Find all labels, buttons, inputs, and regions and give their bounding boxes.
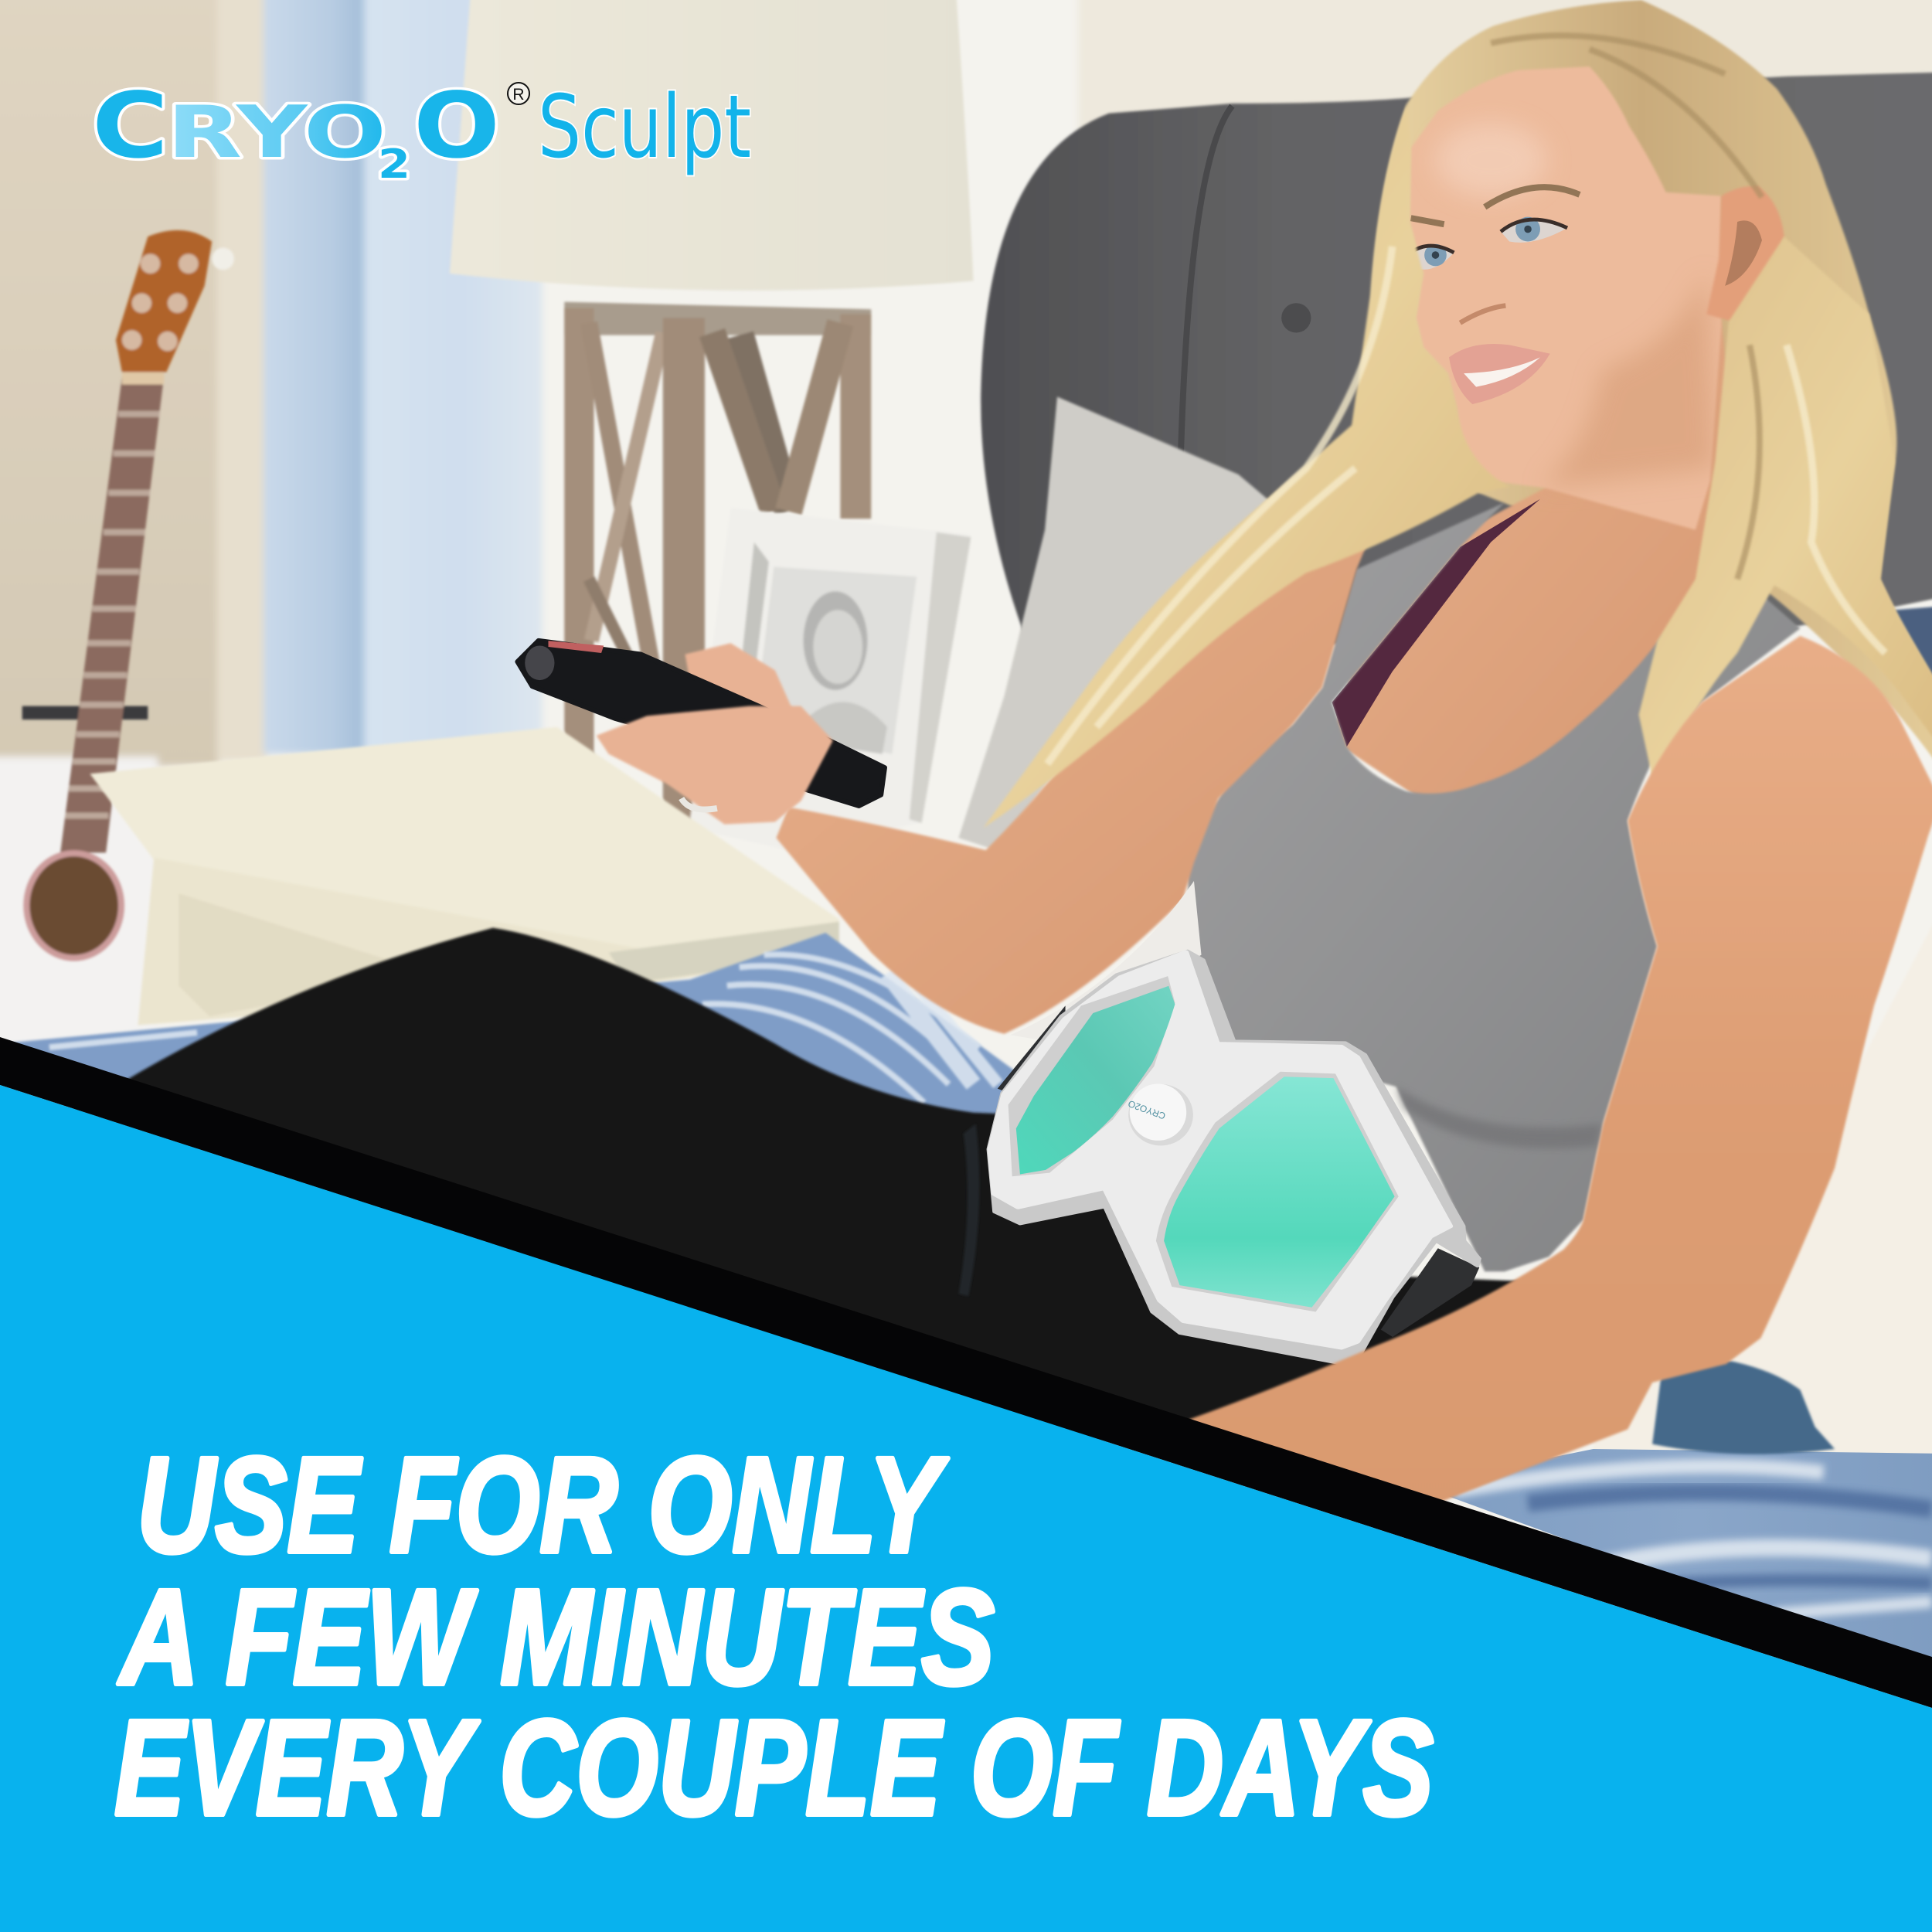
right arm and forearm [1189, 636, 1932, 1515]
bedding right [1417, 1449, 1932, 1688]
leggings fold [958, 1124, 979, 1296]
registered mark: R [512, 86, 525, 104]
left strap [998, 1005, 1066, 1094]
button [1128, 1083, 1193, 1145]
blue panel [0, 1085, 1932, 1932]
nightstand [90, 727, 839, 1026]
button logo: CRYO2O [1127, 1098, 1167, 1121]
raised arm [776, 543, 1368, 1034]
headboard [981, 71, 1932, 647]
headline line 2: A FEW MINUTES [117, 1562, 995, 1713]
forehead highlight [1435, 123, 1546, 197]
logo O: O [413, 73, 500, 179]
headline line 3: EVERY COUPLE OF DAYS [114, 1692, 1434, 1844]
logo [92, 73, 500, 188]
leggings [74, 928, 1528, 1447]
lamp shade [450, 0, 974, 291]
eyes [1411, 217, 1567, 270]
remote lens [525, 645, 554, 680]
registered mark [508, 83, 529, 104]
remote buttons [549, 641, 604, 653]
right strap [1381, 1248, 1479, 1337]
headboard wing seam [1180, 106, 1232, 468]
lower recess [1156, 1072, 1399, 1312]
black diagonal band [0, 1037, 1932, 1708]
lower gel pad [1164, 1077, 1395, 1308]
eyebrows [1411, 187, 1580, 224]
hair lowlights [1491, 36, 1762, 579]
right hair locks [1639, 236, 1932, 801]
logo RYO: RYO [167, 90, 386, 174]
cream pillow [1590, 850, 1932, 1478]
mouth [1449, 344, 1550, 404]
bedding left [12, 933, 1016, 1232]
blanket tassel [1652, 1355, 1835, 1454]
sports bra [1332, 499, 1540, 747]
device rim [988, 951, 1479, 1365]
bedding pattern [49, 954, 998, 1103]
hair highlights [1047, 247, 1885, 764]
logo C: C [92, 73, 168, 179]
upper recess [1009, 976, 1175, 1176]
headline [114, 1430, 1434, 1844]
blue blanket behind shoulder [1849, 604, 1932, 764]
lamp base [564, 302, 871, 831]
teeth [1464, 357, 1540, 387]
headline line 1: USE FOR ONLY [137, 1430, 949, 1581]
grey pillow [958, 396, 1318, 850]
neck and chest [1331, 321, 1750, 813]
face and neck shading [1410, 66, 1721, 530]
thumb [685, 643, 794, 715]
remote control [518, 641, 885, 806]
logo subscript 2: 2 [378, 141, 410, 188]
ring [682, 798, 717, 810]
nose shadow [1460, 305, 1505, 323]
sculpt belt device [988, 951, 1479, 1365]
ear inner [1725, 220, 1762, 286]
left hair strand [983, 104, 1509, 828]
ear [1706, 186, 1784, 321]
cheek shading [1540, 271, 1715, 488]
guitar [22, 230, 234, 961]
fingers [597, 706, 833, 825]
logo Sculpt: Sculpt [538, 77, 751, 178]
tank top [1186, 503, 1800, 1271]
headboard tuft [1281, 303, 1311, 332]
white pillow under arm [1010, 881, 1202, 1041]
picture frame [689, 508, 971, 852]
device body [991, 953, 1450, 1347]
tank top fold [1396, 1087, 1602, 1148]
upper gel pad [1016, 986, 1175, 1175]
hair back and top [1370, 0, 1932, 813]
